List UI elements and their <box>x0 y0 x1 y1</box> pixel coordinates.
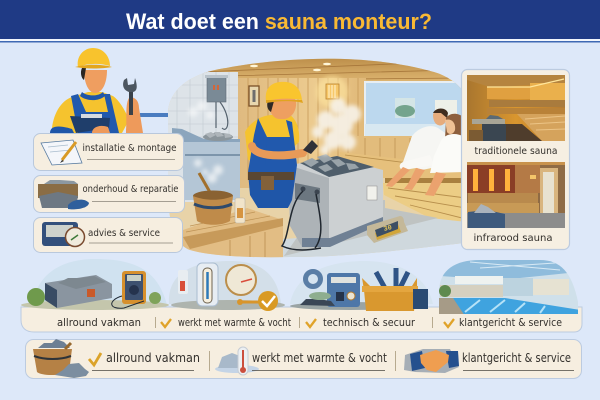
steam left <box>188 101 223 183</box>
card: installatie & montage <box>34 134 184 170</box>
label: infrarood sauna: infrarood sauna <box>474 233 552 244</box>
panel: sauna types <box>462 70 570 250</box>
label: traditionele sauna: traditionele sauna <box>474 146 558 157</box>
digital meter <box>367 216 408 243</box>
wooden wall <box>238 78 366 188</box>
image: heater and multimeter <box>21 259 169 310</box>
icon: notepad and pencil <box>41 140 82 165</box>
card: onderhoud & reparatie <box>34 176 184 212</box>
icon: control panel and gauge <box>42 222 84 246</box>
card: advies & service <box>34 218 182 252</box>
panelled wall beneath window <box>358 136 412 160</box>
icon: stones with thermometer <box>215 347 259 375</box>
couple in bathrobes <box>386 108 466 196</box>
card: onderhoud & reparatie: onderhoud & reparatie <box>82 184 178 195</box>
field worker with wrench <box>50 48 143 133</box>
bottom strip: klantgericht & service <box>462 351 571 365</box>
wooden bucket with ladle <box>193 173 245 225</box>
tiled wall <box>165 72 238 202</box>
title banner <box>0 0 600 42</box>
image: tools and control box <box>290 261 433 311</box>
mid strip base: werkt met warmte & vocht <box>178 317 291 329</box>
image: swimming pool <box>439 260 578 314</box>
icon: bucket with stones <box>33 339 89 378</box>
mid strip base: technisch & secuur <box>323 317 416 329</box>
ceiling <box>204 58 461 88</box>
sauna technician <box>245 82 318 208</box>
main heater with stones <box>282 154 383 250</box>
card: advies & service: advies & service <box>88 228 160 239</box>
window <box>365 82 465 136</box>
bench <box>344 153 461 183</box>
card: installatie & montage: installatie & montage <box>82 143 176 154</box>
image: traditional sauna <box>467 75 565 141</box>
counter <box>183 208 283 260</box>
mid strip base <box>21 258 582 332</box>
image: thermometer and gauge <box>169 261 285 311</box>
steam above main heater <box>312 98 361 155</box>
image: infrared sauna <box>467 162 565 228</box>
digital meter: 30 <box>383 224 393 234</box>
left heater with stones <box>172 128 240 200</box>
task cards <box>34 134 184 252</box>
title: Wat doet een sauna monteur? <box>126 9 432 34</box>
wall lamp <box>316 76 348 108</box>
electrical box <box>205 75 228 129</box>
bottom strip: werkt met warmte & vocht <box>252 351 387 365</box>
clipboard <box>70 114 110 133</box>
connector bar <box>140 113 170 117</box>
bottom strip <box>26 339 582 378</box>
floor and decking <box>283 183 461 257</box>
icon: stones and hose <box>38 180 89 209</box>
mid strip base: klantgericht & service <box>459 317 562 329</box>
check <box>89 353 101 365</box>
main illustration: sauna scene <box>165 55 470 260</box>
bottom strip: allround vakman <box>106 351 200 365</box>
picture frame <box>249 86 259 106</box>
check: allround vakman: allround vakman <box>57 317 141 329</box>
icon: handshake <box>404 349 459 373</box>
